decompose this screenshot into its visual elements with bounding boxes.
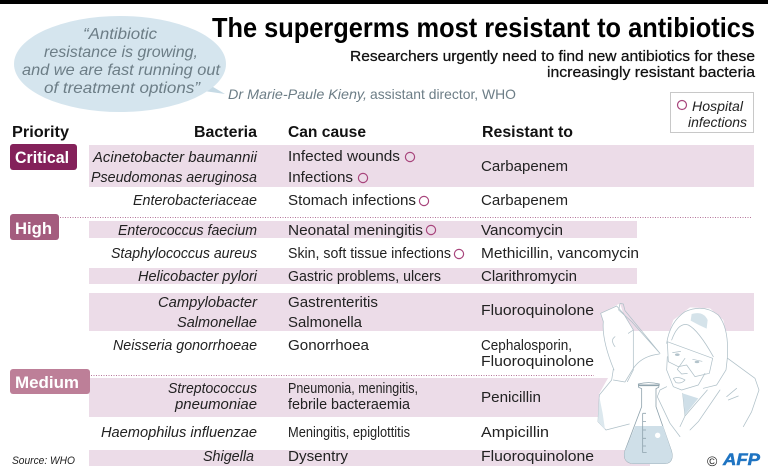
credit: AFP logo: AFP <box>722 450 761 469</box>
can cause column: Neonatal meningitis <box>288 223 423 239</box>
badge: critical <box>10 144 77 170</box>
goggles <box>667 342 713 377</box>
resistant to column: Cephalosporin, <box>481 338 572 354</box>
column headers: Priority <box>12 124 69 141</box>
bacteria column: Neisseria gonorrhoeae <box>113 338 257 354</box>
resistant to column: Vancomycin <box>481 223 563 239</box>
can cause column: Skin, soft tissue infections <box>288 246 451 262</box>
can cause column <box>288 149 464 465</box>
resistant to column: Methicillin, vancomycin <box>481 246 639 262</box>
quote bubble <box>14 16 226 112</box>
bacteria column: Salmonellae <box>177 315 257 331</box>
column headers: Bacteria <box>194 124 257 141</box>
can cause column: febrile bacteraemia <box>288 397 411 413</box>
row stripes <box>89 145 754 466</box>
column headers: Can cause <box>288 124 366 141</box>
resistant to column: Carbapenem <box>481 159 568 175</box>
quote bubble: resistance is growing, <box>44 44 198 61</box>
badge: high: High <box>15 219 52 238</box>
quote attribution: assistant director, WHO <box>370 86 516 102</box>
bacteria column: Acinetobacter baumannii <box>92 150 258 166</box>
hair <box>667 308 728 388</box>
resistant to column: Fluoroquinolone <box>481 303 594 319</box>
subtitle <box>350 48 756 81</box>
bacteria column: pneumoniae <box>174 397 257 413</box>
bacteria column: Campylobacter <box>158 295 258 311</box>
legend: hospital infections: infections <box>688 114 747 130</box>
bacteria column: Streptococcus <box>168 381 257 397</box>
credit: AFP logo: © <box>707 453 718 469</box>
resistant to column: Clarithromycin <box>481 269 577 285</box>
can cause column: Gastrenteritis <box>288 295 378 311</box>
face <box>667 357 705 390</box>
legend: hospital infections <box>670 92 754 132</box>
can cause column: Meningitis, epiglottitis <box>288 425 410 441</box>
flask <box>624 383 672 464</box>
pipette <box>619 303 660 353</box>
subtitle: increasingly resistant bacteria <box>547 64 756 81</box>
bacteria column: Staphylococcus aureus <box>111 246 257 262</box>
column headers <box>12 124 573 141</box>
bacteria column: Enterococcus faecium <box>118 223 257 239</box>
resistant to column: Fluoroquinolone <box>481 354 594 370</box>
can cause column: Gastric problems, ulcers <box>288 269 441 285</box>
resistant to column: Ampicillin <box>481 425 549 441</box>
illustration: scientist with pipette and flask <box>598 303 759 464</box>
can cause column: Infections <box>288 170 353 186</box>
quote bubble: of treatment options” <box>44 80 201 97</box>
bacteria column: Helicobacter pylori <box>138 269 258 285</box>
quote attribution <box>228 86 516 102</box>
bacteria column: Shigella <box>203 449 254 465</box>
badge: high <box>10 214 59 240</box>
subtitle: Researchers urgently need to find new antibiotics for these <box>350 48 755 65</box>
can cause column: Salmonella <box>288 315 363 331</box>
badge: medium: Medium <box>15 373 79 392</box>
priority separators <box>60 218 752 376</box>
quote bubble: “Antibiotic <box>83 26 157 43</box>
can cause column: Pneumonia, meningitis, <box>288 381 418 397</box>
resistant to column <box>481 159 639 465</box>
badge: critical: Critical <box>15 148 69 167</box>
bacteria column: Pseudomonas aeruginosa <box>91 170 257 186</box>
quote bubble: and we are fast running out <box>22 62 221 79</box>
can cause column: Infected wounds <box>288 149 400 165</box>
bacteria column: Haemophilus influenzae <box>101 425 257 441</box>
resistant to column: Fluoroquinolone <box>481 449 594 465</box>
resistant to column: Penicillin <box>481 390 541 406</box>
legend: hospital infections: Hospital <box>692 98 744 114</box>
can cause column: Dysentry <box>288 449 349 465</box>
can cause column: Stomach infections <box>288 193 416 209</box>
source: Source: WHO <box>12 455 75 467</box>
can cause column: Gonorrhoea <box>288 338 370 354</box>
bacteria column <box>91 150 258 465</box>
hand <box>601 306 633 382</box>
resistant to column: Carbapenem <box>481 193 568 209</box>
credit: AFP logo <box>707 450 761 469</box>
bacteria column: Enterobacteriaceae <box>133 193 257 209</box>
quote attribution: Dr Marie-Paule Kieny, <box>228 86 367 102</box>
badge: medium <box>10 369 90 394</box>
column headers: Resistant to <box>482 124 573 141</box>
